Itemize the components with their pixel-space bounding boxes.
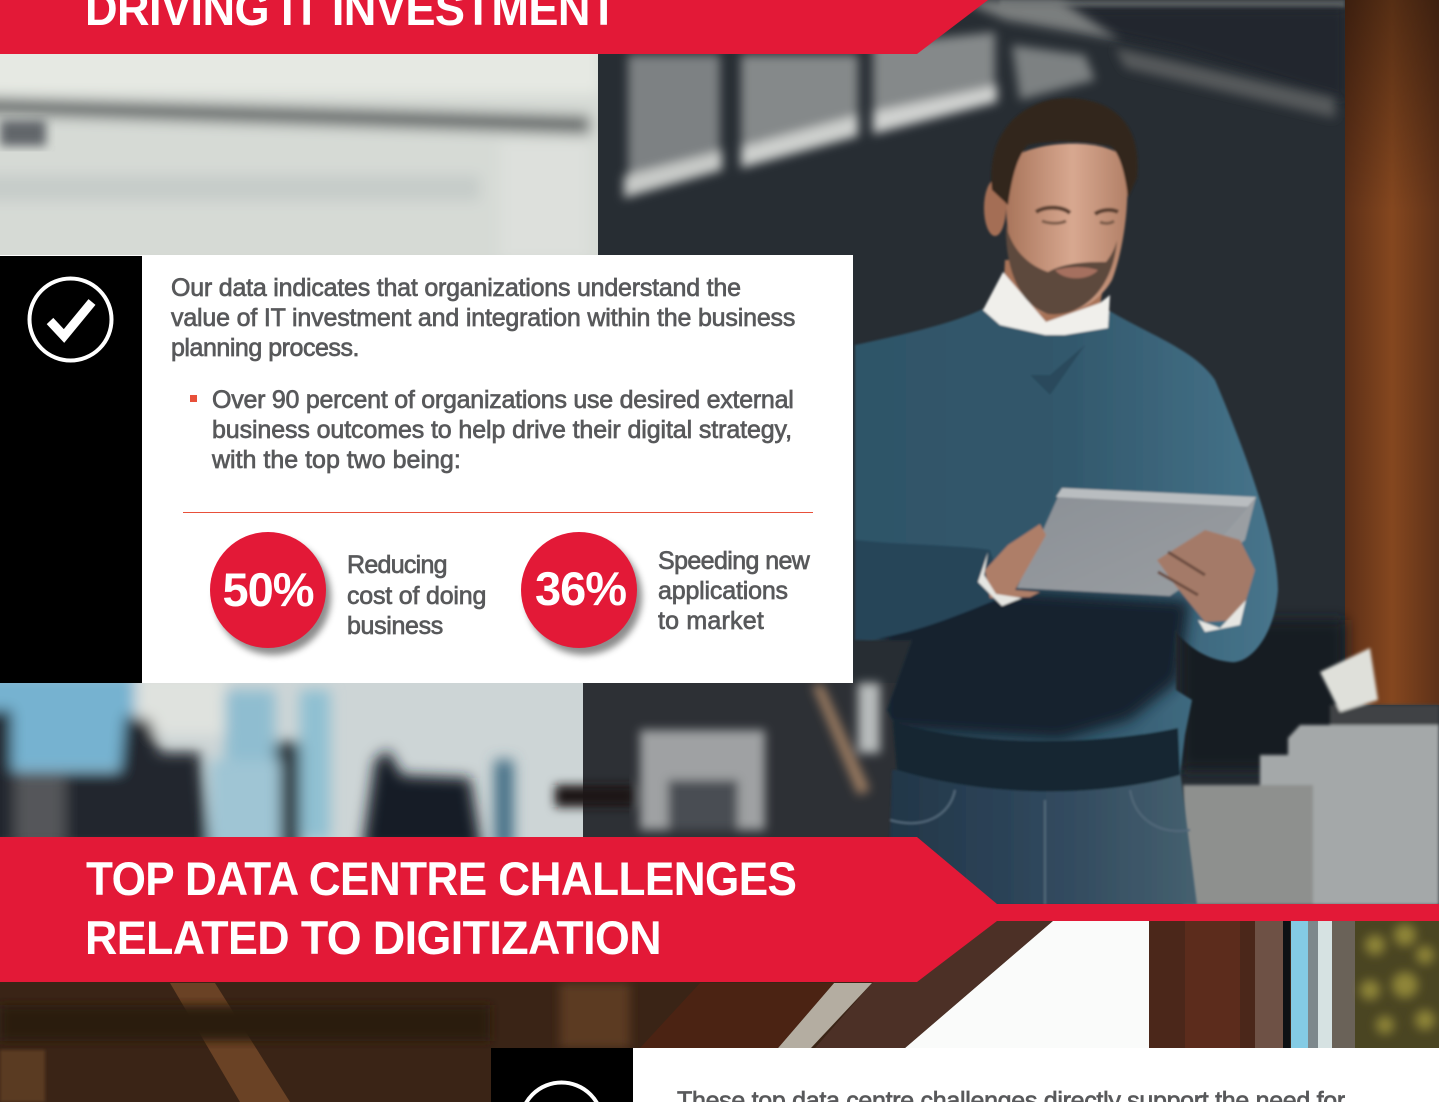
neck [1003, 260, 1108, 332]
waistband [893, 722, 1180, 791]
icon: circle, cropped [524, 1080, 599, 1102]
label: speeding new applications: to market [658, 607, 764, 635]
text block: intro: Our data indicates that organizations understand the [171, 274, 741, 302]
dark wall right of the man [1180, 620, 1345, 770]
stat: 50 percent: 50% [222, 563, 314, 616]
icon panel: black sidebar with check [0, 256, 142, 683]
ear [984, 180, 1006, 236]
panel: challenges text, cut off at the bottom [491, 1048, 1439, 1102]
label: speeding new applications: Speeding new [658, 547, 809, 575]
heading: top data centre challenges: RELATED TO DIGITIZATION [85, 911, 661, 964]
dark column and wall [598, 50, 1348, 850]
text block: bullet: with the top two being: [212, 446, 461, 474]
sweater body [855, 308, 1278, 791]
mouth [1055, 267, 1098, 278]
jeans [888, 770, 1197, 905]
outside window [905, 920, 1149, 1048]
label: reducing cost: Reducing [347, 551, 447, 579]
text block: bullet [212, 386, 794, 474]
window stripes [1283, 920, 1290, 1048]
stat: 50 percent [210, 532, 326, 648]
wooden ceiling beam left [170, 983, 290, 1102]
lower background photo [0, 920, 1439, 1102]
left window wall [0, 54, 598, 255]
label: speeding new applications: applications [658, 577, 788, 605]
beard [1006, 225, 1117, 314]
right cuff [1198, 600, 1246, 632]
label: reducing cost: business [347, 612, 443, 640]
ceiling beams [1000, 0, 1345, 8]
second red banner [0, 837, 1439, 982]
man with tablet [855, 98, 1278, 905]
wood column [1345, 0, 1439, 705]
right hand [1157, 530, 1255, 622]
text block: intro: value of IT investment and integration within the business [171, 304, 795, 332]
foliage [1355, 920, 1439, 1048]
tablet [1017, 488, 1256, 596]
left sleeve [855, 540, 1005, 640]
left cuff [978, 552, 1022, 606]
top red banner [0, 0, 988, 54]
torso shadow [880, 590, 1190, 740]
collar V [1030, 345, 1085, 395]
text block: bullet: business outcomes to help drive their digital strategy, [212, 416, 792, 444]
text block: intro: planning process. [171, 334, 359, 362]
jeans pockets and seams [890, 790, 1190, 905]
blurred skyline [0, 683, 583, 837]
angled wooden beam [815, 920, 1054, 1048]
panel: data indicates [0, 255, 853, 683]
face [1006, 144, 1127, 314]
heading: top data centre challenges [85, 852, 796, 964]
upper window panes [624, 32, 1095, 198]
pale strip [778, 983, 872, 1048]
cabinets and tissue box [1183, 648, 1439, 905]
stat: 36 percent [521, 532, 637, 648]
text block: bullet: Over 90 percent of organizations use desired external [212, 386, 794, 414]
shirt collar [983, 272, 1110, 335]
left hand [985, 524, 1046, 598]
stat: 36 percent: 36% [535, 562, 626, 615]
brown frame [1149, 920, 1283, 1048]
red divider [183, 512, 813, 513]
eyes [1036, 208, 1118, 214]
blurred office desk [583, 683, 913, 838]
label: reducing cost [347, 551, 486, 640]
label: reducing cost: cost of doing [347, 582, 486, 610]
icon panel: black sidebar [491, 1048, 633, 1102]
bullet marker [190, 395, 197, 402]
icon: check mark in circle [28, 276, 114, 362]
heading: top data centre challenges: TOP DATA CENTRE CHALLENGES [86, 852, 796, 905]
text block: intro [170, 274, 795, 362]
reddish wood [640, 983, 834, 1048]
label: speeding new applications [658, 547, 810, 635]
hair [991, 98, 1138, 205]
